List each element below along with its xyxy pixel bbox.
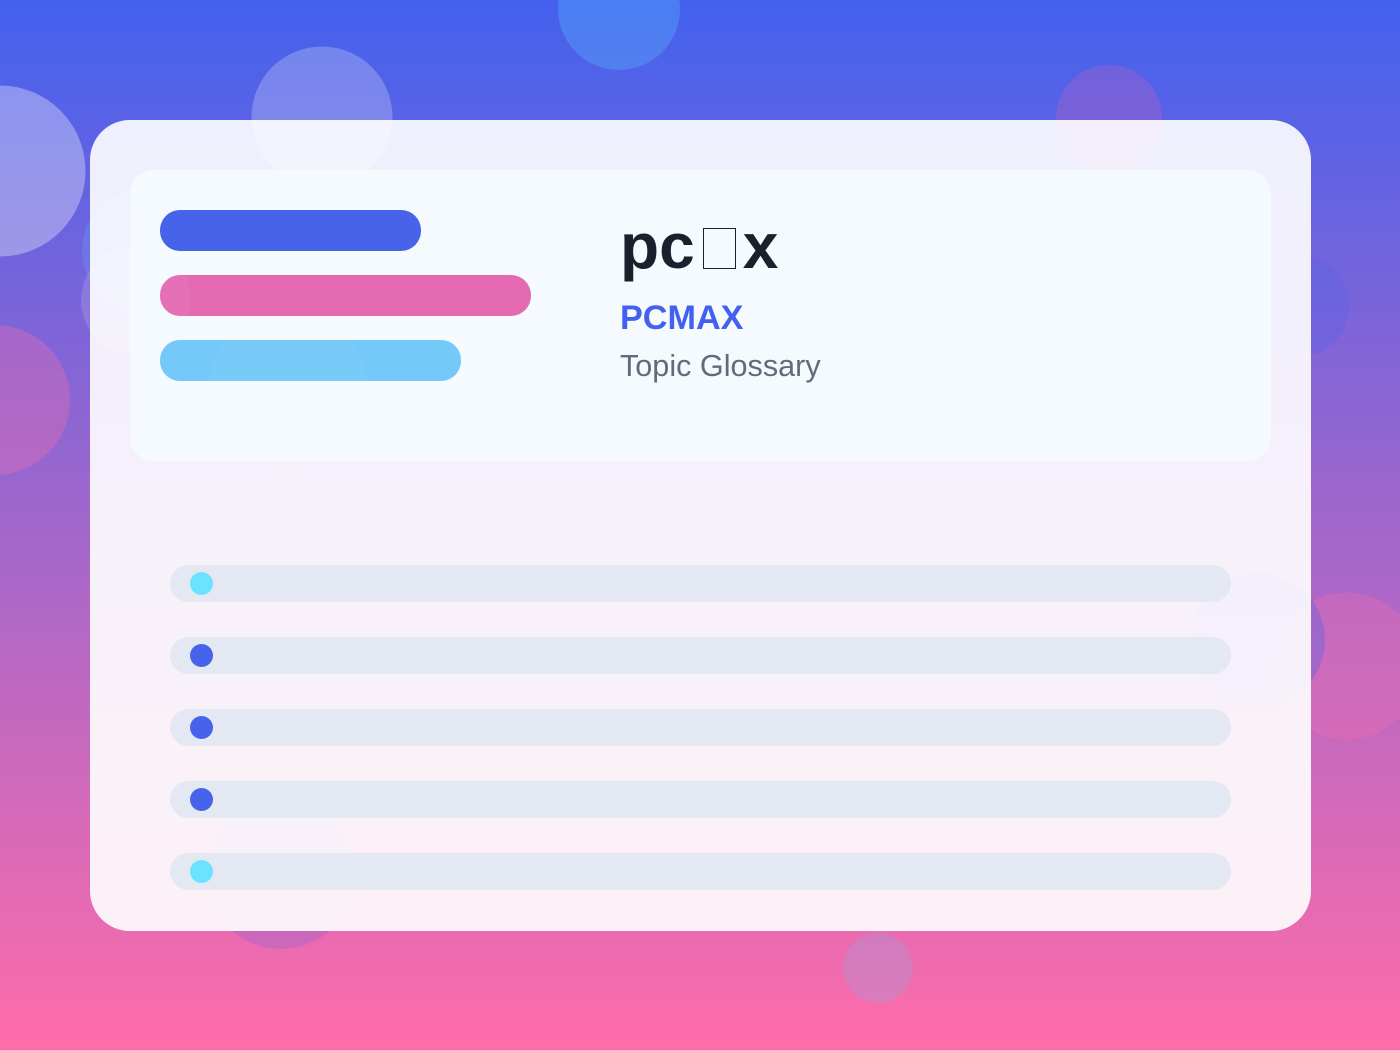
cyan bar circle overlay [208,312,368,472]
title: pcx [620,210,779,282]
missing-glyph box in title [704,228,736,268]
cyan bar [160,340,461,381]
row 4 [170,781,1231,818]
pink bar [160,275,531,316]
pink bar circle overlay [81,245,191,355]
header panel [81,170,1271,472]
row 3 [170,709,1231,746]
main card [81,120,1311,931]
subtitle: PCMAX [620,299,744,337]
glossary rows [170,565,1231,890]
blue bar [160,210,421,251]
row 5 [170,853,1231,890]
row 2 [170,637,1231,674]
row 1 [170,565,1231,602]
caption: Topic Glossary [620,349,821,383]
